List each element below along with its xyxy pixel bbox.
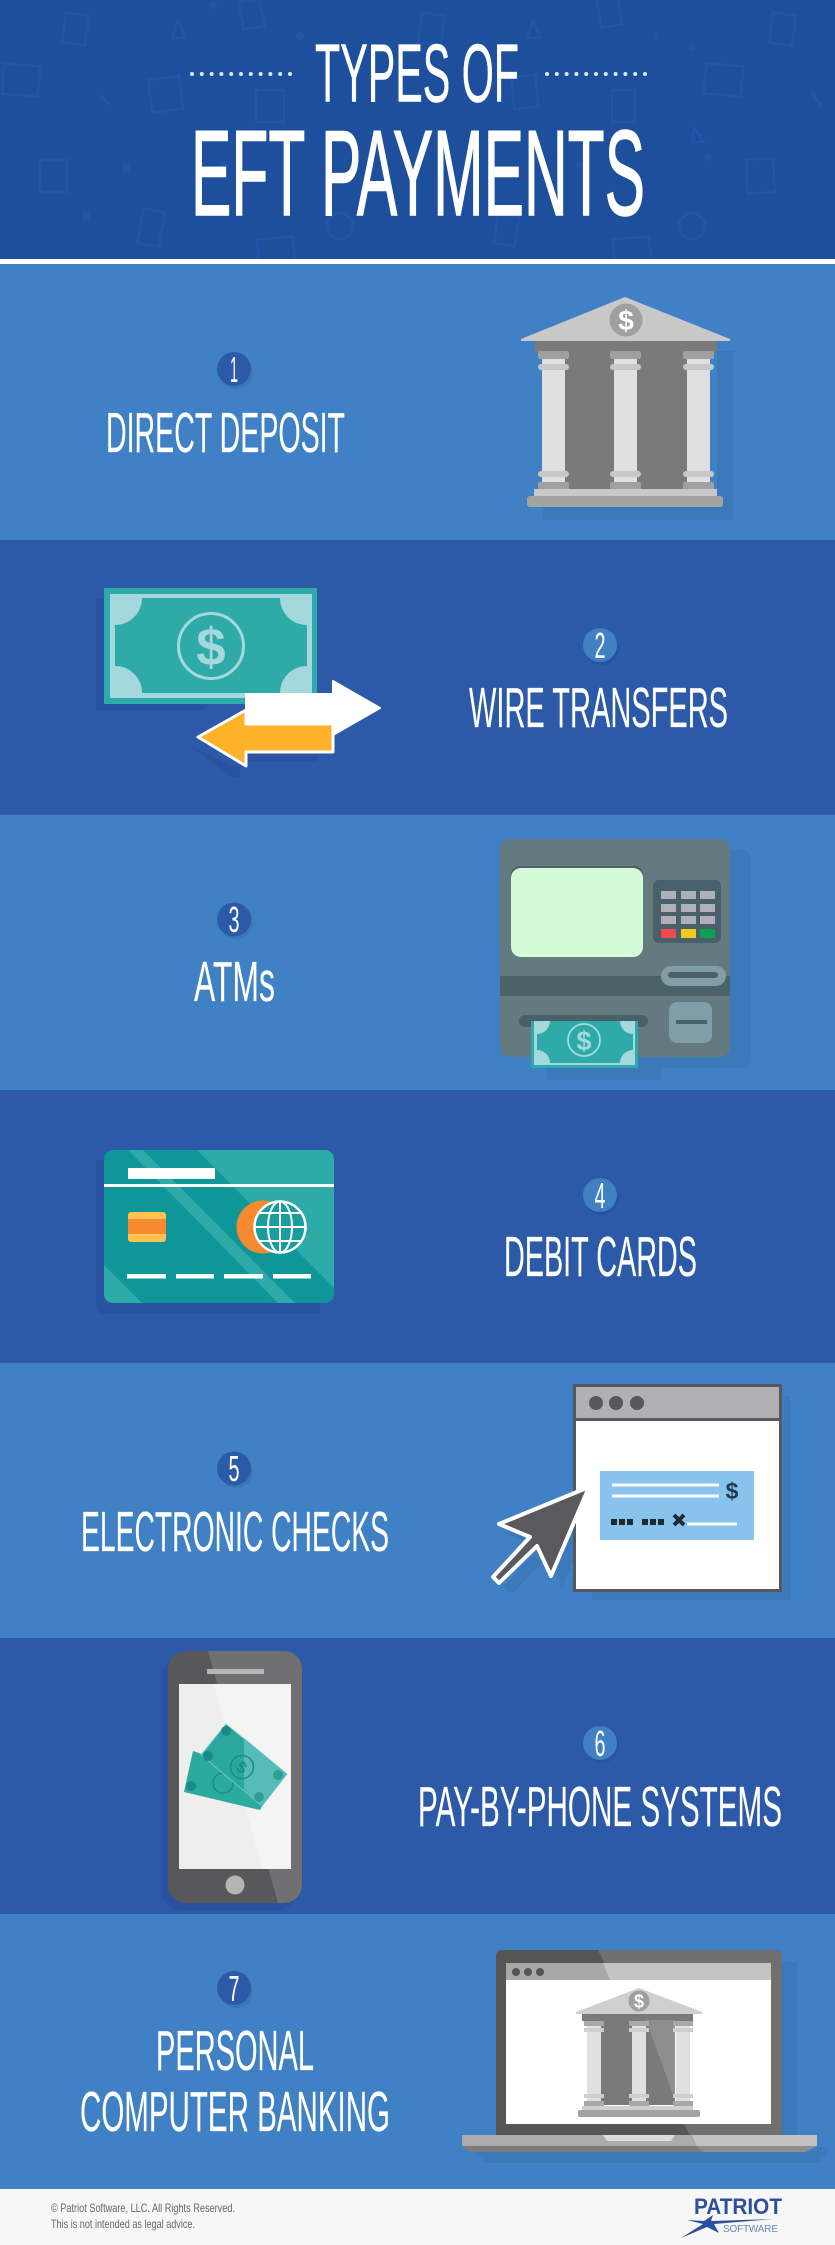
- heading: personal computer banking: PERSONAL: [156, 2019, 314, 2083]
- icon: money transfer: $: [196, 618, 226, 677]
- panel: pay-by-phone systems: [0, 1638, 835, 1914]
- heading: ATMs: ATMs: [194, 950, 275, 1014]
- icon: laptop with bank: $: [634, 1992, 644, 2012]
- icon: bank: [521, 297, 733, 520]
- badge: 4: [583, 1175, 619, 1216]
- icon: ATM machine: [500, 839, 750, 1080]
- title dotted rule left: [192, 72, 292, 76]
- icon: laptop with bank: [462, 1950, 828, 2163]
- badge: 1: [217, 349, 253, 390]
- panel: personal computer banking: [0, 1914, 835, 2189]
- badge: 7: [217, 1968, 253, 2009]
- badge: 5: [217, 1448, 253, 1489]
- white divider: [0, 259, 835, 264]
- badge: 1: 1: [230, 349, 238, 390]
- logo: Patriot Software: SOFTWARE: [723, 2224, 778, 2235]
- badge: 3: 3: [228, 899, 240, 940]
- badge: 2: [583, 625, 619, 666]
- icon: debit card: [96, 1150, 334, 1314]
- icon: bank: $: [618, 305, 634, 336]
- copyright text: © Patriot Software, LLC. All Rights Reserved.: [51, 2201, 235, 2215]
- panel: debit cards: [0, 1090, 835, 1363]
- badge: 3: [217, 899, 253, 940]
- badge: 6: [583, 1723, 619, 1764]
- panel: ATMs: [0, 815, 835, 1090]
- text: TYPES OF: [315, 26, 519, 120]
- panel: direct deposit: [0, 264, 835, 540]
- icon: browser window with check and cursor: [493, 1386, 790, 1600]
- badge: 7: 7: [228, 1968, 240, 2009]
- badge: 6: 6: [594, 1723, 606, 1764]
- footer: [0, 2189, 835, 2245]
- panel: electronic checks: [0, 1363, 835, 1638]
- badge: 4: 4: [594, 1175, 606, 1216]
- icon: smartphone with bills: $: [233, 1759, 249, 1778]
- panel: electronic checks: ELECTRONIC CHECKS: [81, 1500, 389, 1564]
- header panel: [0, 0, 835, 264]
- title dotted rule right: [547, 72, 646, 76]
- icon: money transfer: [96, 588, 380, 778]
- logo: Patriot Software: [681, 2194, 783, 2238]
- heading: personal computer banking: COMPUTER BANKING: [80, 2080, 390, 2144]
- icon: ATM machine: $: [576, 1026, 592, 1056]
- logo: Patriot Software: PATRIOT: [694, 2194, 783, 2219]
- panel: wire transfers: [0, 540, 835, 815]
- icon: browser window with check and cursor: $: [726, 1478, 739, 1504]
- icon: smartphone with bills: [162, 1651, 302, 1910]
- disclaimer text: This is not intended as legal advice.: [51, 2217, 195, 2231]
- badge: 5: 5: [228, 1448, 240, 1489]
- heading: direct deposit: DIRECT DEPOSIT: [106, 401, 345, 465]
- badge: 2: 2: [594, 625, 606, 666]
- heading: personal computer banking: [80, 2019, 390, 2144]
